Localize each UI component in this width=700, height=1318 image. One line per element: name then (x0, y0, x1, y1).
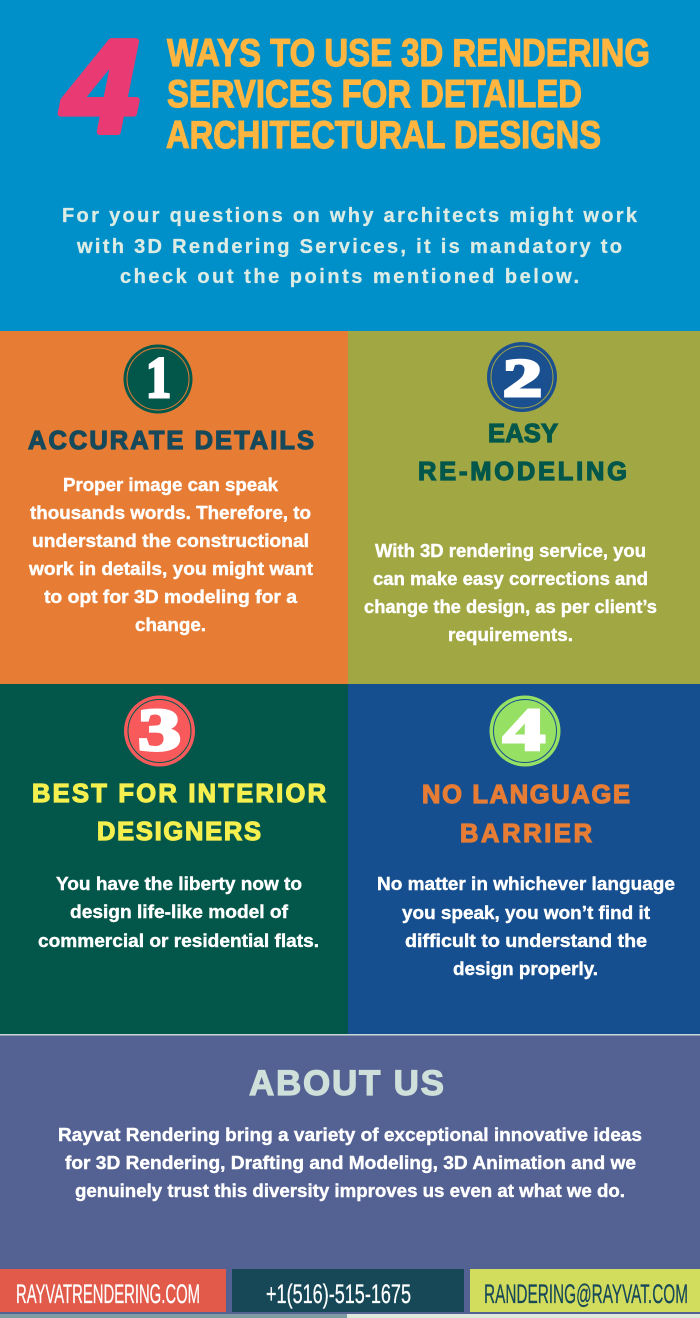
panel: about us (0, 1034, 700, 1314)
title: SERVICES FOR DETAILED (167, 73, 582, 116)
heading: no language barrier (422, 781, 630, 848)
body text: accurate details: understand the constructional (32, 531, 309, 551)
icon: number 2 badge: 2 (503, 348, 542, 408)
body text: easy re-modeling: requirements. (448, 625, 573, 645)
intro text: For your questions on why architects might work (62, 205, 638, 227)
body text: best for interior designers: commercial or residential flats. (38, 931, 319, 951)
body text: no language barrier: design properly. (453, 959, 598, 979)
body text: accurate details: thousands words. Therefore, to (30, 503, 311, 523)
icon: number 1 badge: 1 (146, 345, 171, 410)
body text: best for interior designers (38, 874, 319, 951)
icon: number 2 badge (487, 342, 557, 412)
body text: about us: for 3D Rendering, Drafting and Modeling, 3D Animation and we (65, 1153, 636, 1173)
body text: no language barrier: difficult to understand the (405, 931, 647, 951)
icon: number 3 badge (124, 696, 195, 766)
body text: no language barrier (377, 874, 675, 979)
icon: number 4 badge (490, 696, 560, 766)
panel: no language barrier (348, 684, 700, 1034)
body text: best for interior designers: design life-like model of (70, 902, 289, 922)
body text: accurate details: to opt for 3D modeling for a (44, 587, 298, 607)
body text: easy re-modeling (364, 541, 657, 645)
heading: no language barrier: BARRIER (460, 820, 592, 848)
heading: no language barrier: NO LANGUAGE (422, 781, 630, 809)
heading: best for interior designers (32, 780, 326, 846)
body text: about us: genuinely trust this diversity improves us even at what we do. (75, 1181, 625, 1201)
body text: accurate details (28, 475, 313, 635)
body text: accurate details: change. (135, 615, 206, 635)
contact: phone: +1(516)-515-1675 (266, 1279, 411, 1309)
icon: number 3 badge: 3 (138, 697, 181, 763)
heading: easy re-modeling (418, 420, 627, 486)
body text: accurate details: Proper image can speak (63, 475, 279, 495)
contact: email (470, 1269, 700, 1312)
heading: easy re-modeling: EASY (488, 420, 558, 448)
heading: accurate details: ACCURATE DETAILS (28, 427, 314, 455)
icon: number 1 badge (124, 344, 192, 414)
body text: easy re-modeling: can make easy corrections and (373, 569, 648, 589)
body text: easy re-modeling: change the design, as per client’s (364, 597, 657, 617)
heading: about us: ABOUT US (249, 1064, 444, 1103)
intro text: with 3D Rendering Services, it is mandatory to (76, 236, 622, 258)
title (166, 32, 650, 157)
heading: easy re-modeling: RE-MODELING (418, 458, 627, 486)
contact: phone (232, 1269, 464, 1312)
body text: easy re-modeling: With 3D rendering service, you (375, 541, 646, 561)
panel: easy re-modeling (348, 331, 700, 684)
body text: about us (58, 1125, 642, 1201)
body text: accurate details: work in details, you might want (28, 559, 313, 579)
heading: best for interior designers: BEST FOR INTERIOR (32, 780, 326, 808)
icon: number 4 badge: 4 (503, 697, 545, 763)
body text: about us: Rayvat Rendering bring a variety of exceptional innovative ideas (58, 1125, 642, 1145)
heading: best for interior designers: DESIGNERS (97, 818, 261, 846)
contact: website (0, 1269, 226, 1312)
body text: no language barrier: you speak, you won’t find it (402, 903, 650, 923)
panel: accurate details (0, 331, 348, 684)
bottom strip (0, 1314, 700, 1318)
large number 4: 4 (60, 13, 139, 160)
contact: website: RAYVATRENDERING.COM (16, 1279, 200, 1309)
body text: no language barrier: No matter in whichever language (377, 874, 675, 894)
panel: best for interior designers (0, 684, 348, 1034)
header panel (0, 0, 700, 331)
intro text (62, 205, 638, 288)
body text: best for interior designers: You have the liberty now to (56, 874, 302, 894)
intro text: check out the points mentioned below. (120, 266, 579, 288)
title: ARCHITECTURAL DESIGNS (166, 114, 601, 157)
